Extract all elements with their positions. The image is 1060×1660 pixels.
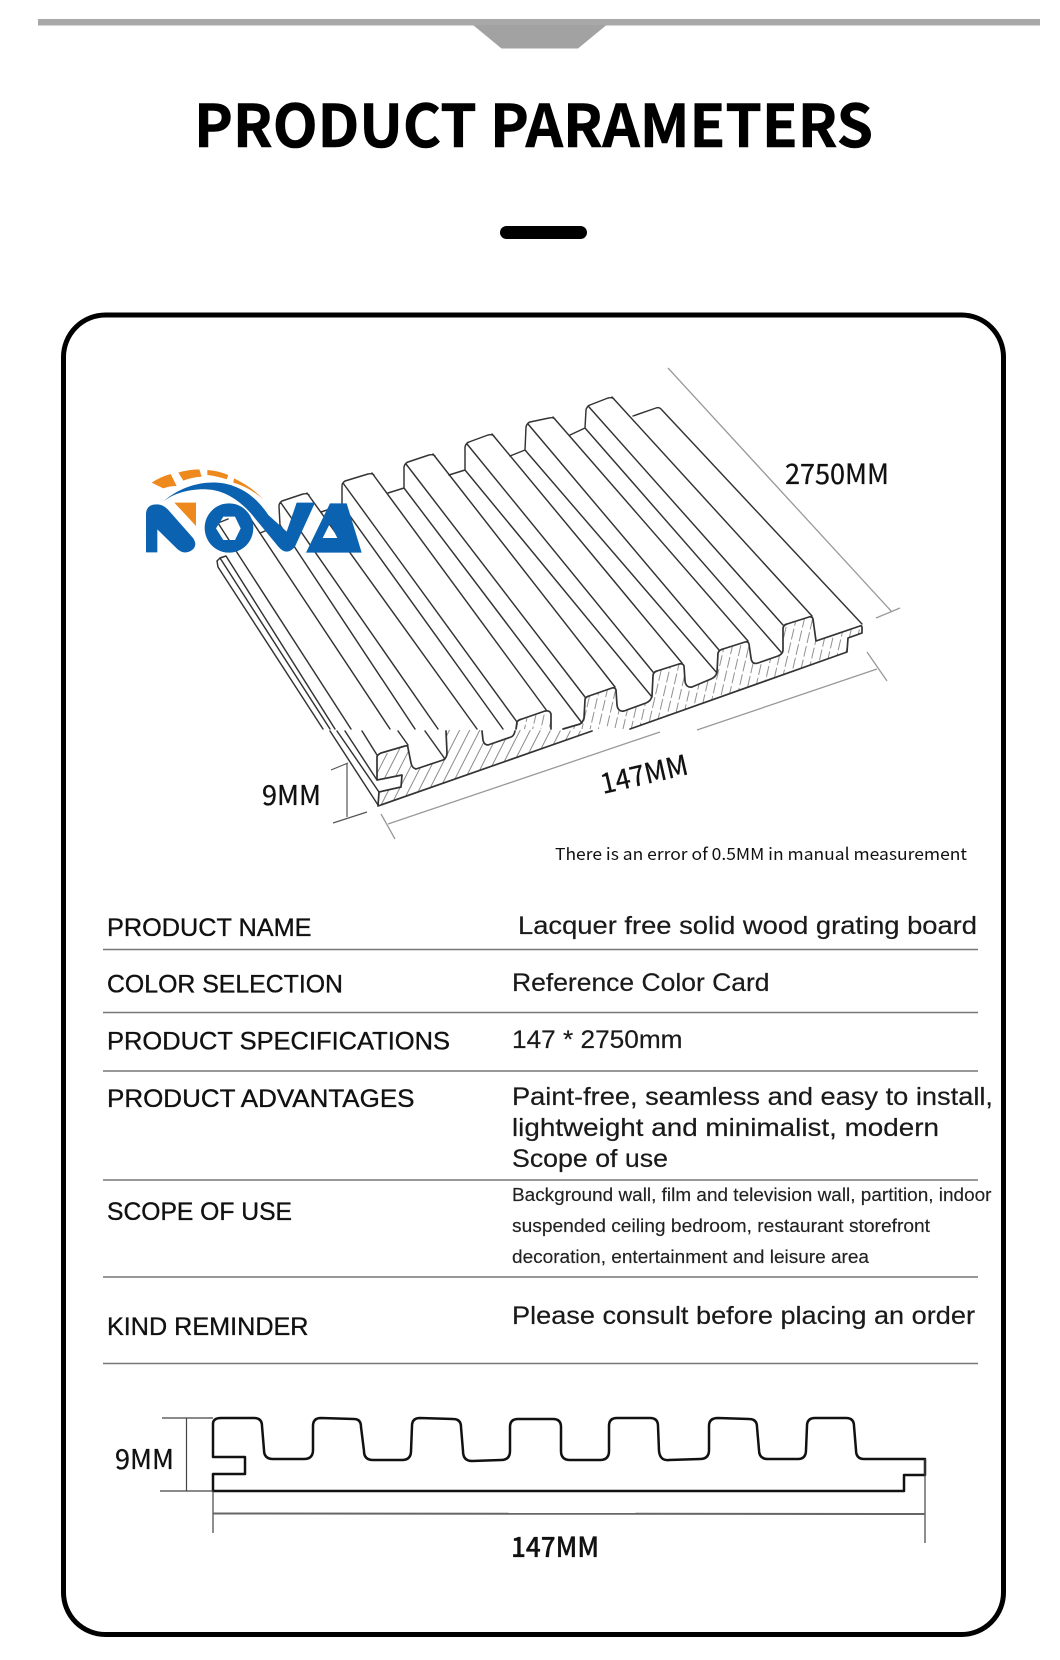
row: product advantages: Paint-free, seamless and easy to install,: [512, 1083, 993, 1111]
label: 147MM: 147MM: [511, 1526, 599, 1566]
board front profile hatching: [377, 616, 862, 806]
logo orange arcs: [152, 469, 263, 526]
row: product advantages: [107, 1083, 993, 1173]
dimension line: 2750MM: [668, 368, 900, 618]
row: kind reminder: Please consult before placing an order: [512, 1302, 975, 1330]
row: color selection: COLOR SELECTION: [107, 970, 343, 998]
dimension line: 9MM: [331, 763, 367, 823]
row: product advantages: lightweight and minimalist, modern: [512, 1114, 939, 1142]
cross-section dimension lines: [160, 1418, 925, 1543]
row: color selection: [107, 969, 770, 998]
row: scope of use: SCOPE OF USE: [107, 1198, 292, 1226]
label: 2750MM: 2750MM: [785, 453, 889, 493]
board longitudinal ridge lines: [217, 397, 862, 805]
row: scope of use: suspended ceiling bedroom, restaurant storefront: [512, 1216, 930, 1236]
label: 147MM: 147MM: [596, 744, 692, 803]
parameters table: [103, 912, 993, 1364]
row: product specifications: PRODUCT SPECIFICATIONS: [107, 1028, 450, 1056]
label: 9MM: 9MM: [262, 774, 321, 813]
NOVA logo: [146, 469, 362, 553]
table row dividers: [103, 950, 978, 1364]
row: color selection: Reference Color Card: [512, 969, 770, 997]
row: product name: Lacquer free solid wood grating board: [518, 912, 977, 940]
row: product advantages: Scope of use: [512, 1145, 668, 1173]
row: kind reminder: [107, 1302, 975, 1341]
row: product name: PRODUCT NAME: [107, 914, 312, 942]
row: product specifications: [107, 1026, 682, 1056]
row: scope of use: Background wall, film and television wall, partition, indoor: [512, 1185, 992, 1205]
cross-section outline: [213, 1418, 925, 1491]
top bar with trapezoid: [38, 19, 1040, 48]
title: PRODUCT PARAMETERS: [194, 79, 873, 164]
panel: parameters card: [64, 315, 1004, 1634]
board front profile outline: [377, 617, 862, 806]
row: product advantages: PRODUCT ADVANTAGES: [107, 1085, 414, 1113]
row: product specifications: 147 * 2750mm: [512, 1026, 682, 1054]
isometric board drawing: [217, 368, 967, 865]
dimension line: 147MM: [381, 652, 887, 839]
label: 9MM: 9MM: [115, 1438, 174, 1477]
row: kind reminder: KIND REMINDER: [107, 1313, 308, 1341]
row: scope of use: decoration, entertainment and leisure area: [512, 1247, 870, 1267]
measurement note: There is an error of 0.5MM in manual measurement: [555, 841, 967, 865]
cross-section diagram: [115, 1418, 925, 1566]
row: scope of use: [107, 1185, 992, 1267]
logo blue letters: [146, 483, 362, 553]
title underline dash: [500, 226, 587, 239]
row: product name: [107, 912, 977, 942]
